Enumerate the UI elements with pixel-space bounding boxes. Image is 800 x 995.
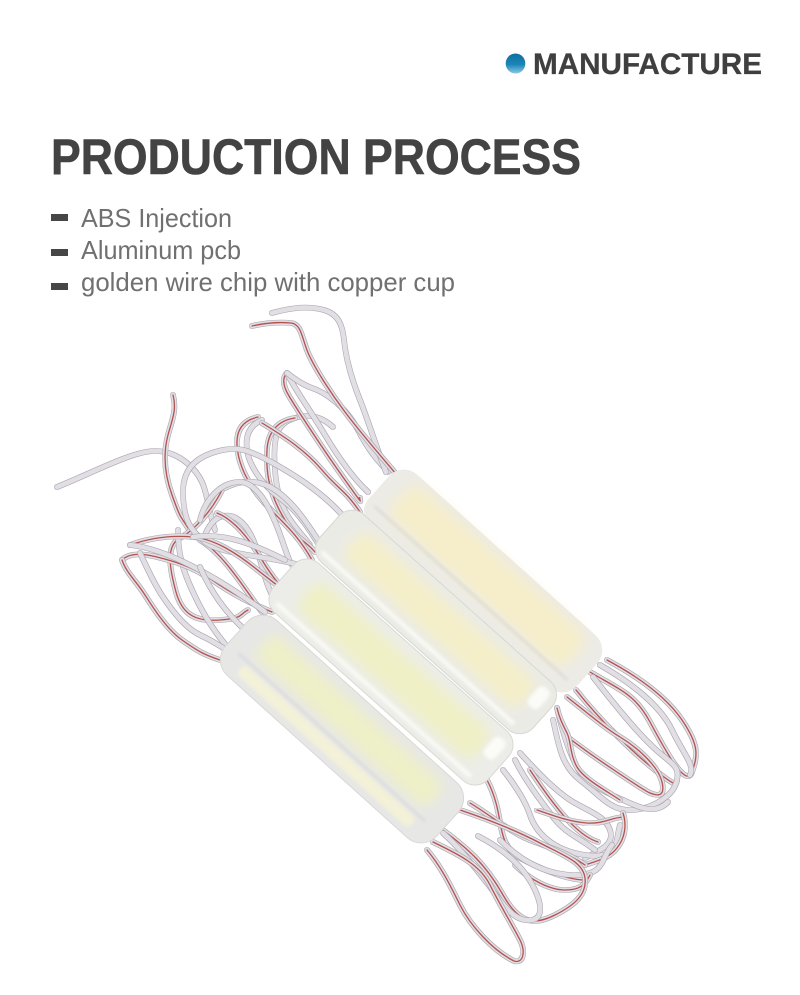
- section label: manufacture: [506, 48, 762, 81]
- wires at top of modules: [57, 308, 396, 660]
- title: PRODUCTION PROCESS: [51, 129, 581, 185]
- feature bullet list: [51, 203, 455, 297]
- icon: blue dot: [506, 54, 525, 74]
- bullet: golden wire chip: golden wire chip with copper cup: [81, 267, 455, 297]
- LED module 4 (back): [356, 461, 610, 701]
- manufacture label text: MANUFACTURE: [533, 48, 762, 81]
- product photo: LED modules with wires: [57, 308, 696, 961]
- LED module 2: [262, 552, 520, 792]
- bullet: aluminum pcb: Aluminum pcb: [81, 235, 241, 265]
- bullet: ABS injection: ABS Injection: [81, 203, 232, 233]
- wires at bottom of modules: [427, 660, 696, 961]
- LED module 1 (front): [212, 606, 472, 852]
- LED module 3: [308, 503, 564, 741]
